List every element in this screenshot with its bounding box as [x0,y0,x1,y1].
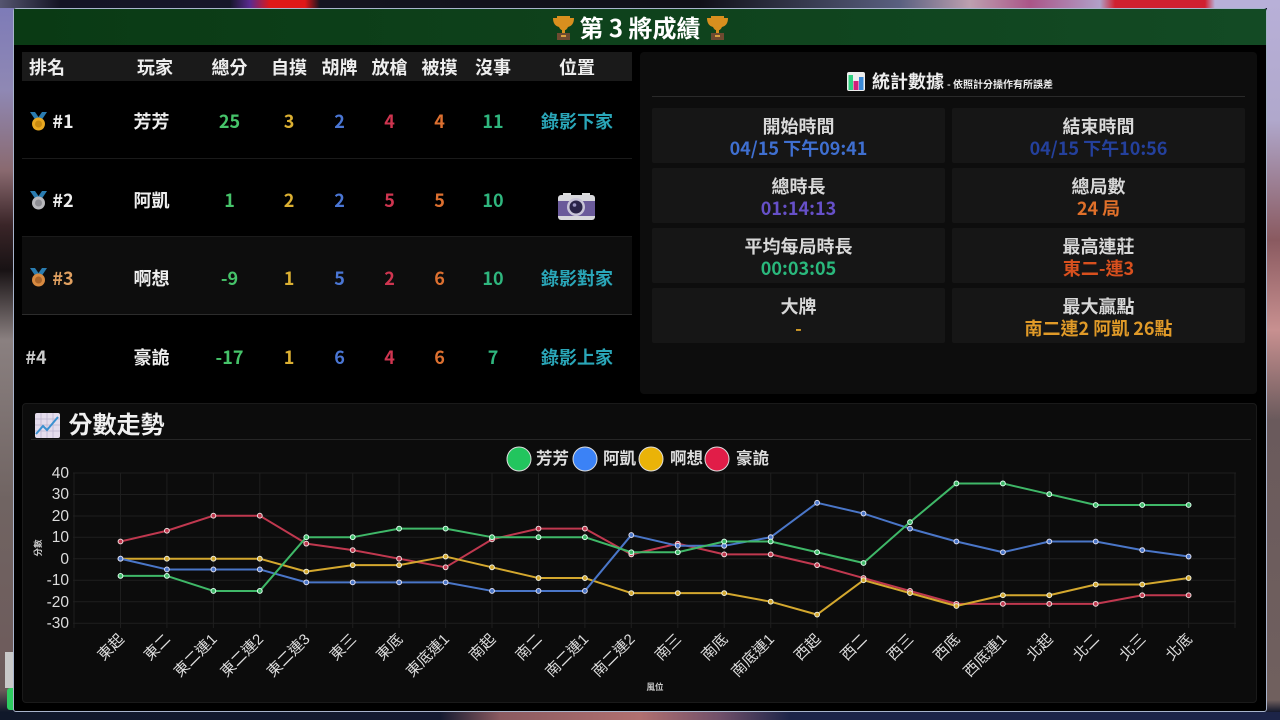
x axis labels: 南二 [513,631,546,664]
stat: total duration [652,168,945,223]
row: rank 1: 11 [482,108,504,134]
row: rank 2: 5 [384,187,395,213]
y axis labels: -20 [47,594,69,611]
title bar [14,9,1266,45]
table header: 沒事 [475,54,511,80]
icon: camera [558,193,595,220]
table header: 自摸 [271,54,307,80]
icon: silver medal [30,191,47,210]
row: rank 2: 阿凱 [134,187,170,213]
x axis labels: 西三 [884,631,917,664]
x axis labels: 東底 [373,631,406,664]
stat: average round: 00:03:05 [761,255,836,281]
y axis labels [47,465,69,632]
stat: big hand: - [795,315,802,341]
row: rank 2: 5 [434,187,445,213]
x axis labels: 南底連1 [728,631,778,681]
panel: score trend [22,403,1257,703]
stat: biggest win [952,288,1245,343]
row: rank 2: 2 [284,187,294,213]
stat: end time [952,108,1245,163]
legend: 豪詭 [736,445,770,469]
row: rank 1: 3 [284,108,294,134]
x axis labels: 東二 [141,631,174,664]
x axis title: 風位 [646,682,664,692]
x axis labels [95,631,1196,681]
y axis labels: 10 [52,529,69,546]
y axis labels: -10 [47,572,69,589]
icon: trend chart [35,413,60,438]
row: rank 3: -9 [221,265,238,291]
icon: trophy left [553,16,574,40]
stat: end time: 結束時間 [1062,113,1134,139]
row: rank 4: 7 [488,344,498,370]
legend [507,445,770,471]
stat: total rounds: 24 局 [1077,195,1120,221]
x axis labels: 南三 [652,631,685,664]
stat: start time [652,108,945,163]
trend heading: 分數走勢 [68,405,164,440]
row: rank 4: 豪詭 [134,344,170,370]
x axis labels: 東底連1 [403,631,453,681]
row: rank 3: 5 [334,265,345,291]
table header: 玩家 [137,54,173,80]
icon: gold medal [30,112,47,130]
icon: trophy right [707,16,728,40]
icon: bronze medal [30,268,47,286]
stat: big hand: 大牌 [780,293,816,319]
x axis labels: 東起 [95,631,128,664]
x axis labels: 北三 [1116,631,1150,664]
x axis labels: 東二連3 [264,631,314,681]
row: rank 2: #2 [52,187,74,213]
table header: 總分 [212,54,248,80]
row: rank 1: #1 [52,108,74,134]
x axis labels: 南二連1 [542,631,592,681]
table header: 被摸 [422,54,458,80]
legend: 芳芳 [536,445,569,469]
stat: total rounds: 總局數 [1072,173,1126,199]
stat: highest streak [952,228,1245,283]
stat: start time: 開始時間 [762,113,834,139]
series: 啊想 [120,557,1189,615]
x axis labels: 西底連1 [960,631,1010,681]
y axis title: 分數 [33,539,43,557]
x axis labels: 北底 [1163,631,1196,664]
stat: average round [652,228,945,283]
statistics heading: 統計數據 - 依照計分操作有所誤差 [872,68,1053,94]
stat: total rounds [952,168,1245,223]
legend: 阿凱 [603,445,636,469]
x axis labels: 南底 [698,631,732,664]
row: rank 1: 芳芳 [134,108,170,134]
table header: 排名 [29,54,65,80]
x axis labels: 東三 [327,631,360,664]
table header: 胡牌 [322,54,358,80]
x axis labels: 西底 [930,631,964,664]
row: rank 3: 1 [284,265,294,291]
row: rank 3 [22,237,632,315]
stat: average round: 平均每局時長 [744,233,852,259]
x axis labels: 南二連2 [589,631,639,681]
row: rank 1: 4 [384,108,395,134]
table header [22,52,632,81]
x axis labels: 東二連1 [171,631,221,681]
panel: statistics [640,52,1257,394]
stat: biggest win: 最大贏點 [1062,293,1134,319]
row: rank 2: 10 [482,187,504,213]
row: rank 4: 4 [384,344,395,370]
series: 阿凱 [120,503,1189,591]
row: rank 3: 2 [384,265,395,291]
series: 豪詭 [120,516,1189,604]
stat: big hand [652,288,945,343]
stat: start time: 04/15 下午09:41 [730,135,867,161]
row: rank 4: #4 [25,344,47,370]
x axis labels: 西二 [838,631,871,664]
row: rank 1: 錄影下家 [541,108,613,134]
row: rank 3: 錄影對家 [541,265,613,291]
y axis labels: 0 [60,551,69,568]
row: rank 4: 錄影上家 [541,344,613,370]
stat: highest streak: 東二-連3 [1063,255,1134,281]
row: rank 3: 啊想 [134,265,170,291]
row: rank 1 [22,81,632,159]
row: rank 3: 6 [434,265,445,291]
row: rank 2: 2 [334,187,345,213]
x axis labels: 南起 [466,631,499,664]
y axis labels: 40 [52,465,69,482]
row: rank 3: #3 [52,265,74,291]
x axis labels: 北起 [1023,631,1057,664]
title: 第 3 將成績 [579,9,701,44]
table header: 位置 [559,54,595,80]
icon: bar chart [847,72,865,91]
stat: total duration: 01:14:13 [761,195,836,221]
x axis labels: 東二連2 [217,631,267,681]
legend: 啊想 [670,445,704,469]
row: rank 1: 4 [434,108,445,134]
row: rank 4 [25,344,613,370]
row: rank 4: -17 [216,344,243,370]
row: rank 4: 6 [334,344,345,370]
row: rank 1: 2 [334,108,345,134]
row: rank 4: 1 [284,344,294,370]
stat: biggest win: 南二連2 阿凱 26點 [1024,315,1173,341]
y axis labels: -30 [47,615,69,632]
row: rank 2: 1 [224,187,235,213]
y axis labels: 20 [52,508,69,525]
series: 芳芳 [120,483,1189,591]
x axis labels: 北二 [1070,631,1103,664]
row: rank 4: 6 [434,344,445,370]
table header: 放槍 [372,54,408,80]
row: rank 1: 25 [219,108,240,134]
x axis labels: 西起 [791,631,824,664]
stat: total duration: 總時長 [772,173,826,199]
row: rank 3: 10 [482,265,504,291]
row: rank 2 [22,159,632,237]
stat: end time: 04/15 下午10:56 [1030,135,1167,161]
y axis labels: 30 [52,486,69,503]
stat: highest streak: 最高連莊 [1062,233,1134,259]
